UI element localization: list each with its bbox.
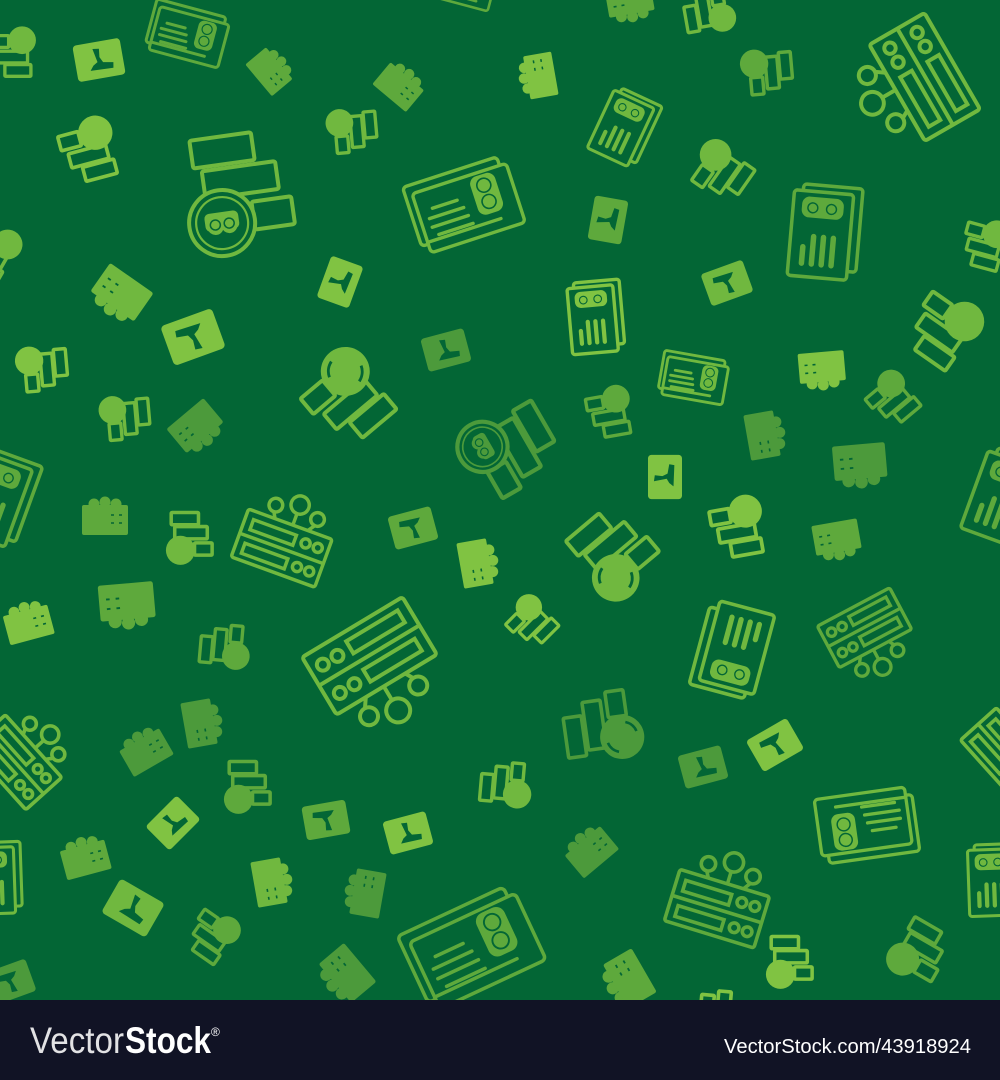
icon: gift card <box>456 537 502 589</box>
icon: litecoin card <box>746 718 804 772</box>
icon: magnifier <box>182 901 246 968</box>
icon: magnifier <box>958 213 1000 273</box>
icon: magnifier <box>324 106 378 154</box>
icon: gift card <box>559 820 619 879</box>
icon: magnifier <box>859 364 925 431</box>
icon: litecoin card <box>387 506 439 550</box>
icon: gift card <box>82 496 128 535</box>
icon: server with nodes <box>960 689 1000 803</box>
icon: litecoin card <box>301 799 351 841</box>
icon: gift card <box>311 943 376 1009</box>
icon: gift card <box>85 263 154 329</box>
icon: large magnifier with bars <box>177 128 298 260</box>
icon: magnifier <box>559 499 670 611</box>
icon: report paper <box>0 445 43 550</box>
icon: magnifier <box>707 492 769 560</box>
icon: magnifier <box>55 112 123 186</box>
icon: litecoin card <box>160 308 226 366</box>
icon: gift card <box>250 856 296 908</box>
icon: gift card <box>604 0 656 26</box>
icon: gift card <box>180 697 226 749</box>
icon: server with nodes <box>302 597 458 749</box>
icon: gift card <box>811 518 863 564</box>
icon: browser with coin <box>657 350 730 405</box>
icon: magnifier <box>166 512 212 565</box>
icon: server with nodes <box>231 480 343 587</box>
icon: magnifier <box>560 687 647 767</box>
logo: VectorStock: Vector <box>30 1020 124 1061</box>
icon: litecoin card <box>677 745 729 789</box>
icon: gift card <box>341 867 387 919</box>
icon: magnifier <box>899 281 992 375</box>
icon: magnifier <box>479 760 534 810</box>
icon: report paper <box>566 279 625 355</box>
logo: VectorStock: Stock <box>125 1020 211 1061</box>
icon: server with nodes <box>0 696 83 810</box>
icon: gift card <box>57 831 112 880</box>
icon: litecoin card <box>587 195 629 245</box>
icon: gift card <box>98 581 157 632</box>
icon: server with nodes <box>664 839 779 948</box>
logo: registered mark: ® <box>211 1025 220 1039</box>
icon: gift card <box>595 948 657 1013</box>
icon: magnifier <box>880 914 955 991</box>
icon: report paper <box>787 183 863 281</box>
icon: magnifier <box>14 343 69 393</box>
icon: magnifier <box>0 26 36 76</box>
icon: magnifier <box>682 0 738 38</box>
icon: gift card <box>798 350 847 392</box>
icon: gift card <box>743 409 789 461</box>
icon: magnifier <box>0 215 28 285</box>
icon: gift card <box>166 398 229 460</box>
icon: report paper <box>689 599 775 701</box>
icon: litecoin card <box>0 958 37 1006</box>
icon: magnifier <box>224 761 270 814</box>
icon: magnifier <box>448 392 566 507</box>
footer bar <box>0 1000 1000 1080</box>
icon: report paper <box>960 445 1000 550</box>
icon: magnifier <box>684 988 741 1040</box>
icon: browser with coin <box>397 884 546 1012</box>
icon: browser with coin <box>144 0 231 68</box>
icon: report paper <box>0 841 22 915</box>
icon: litecoin card <box>382 811 434 855</box>
icon: litecoin card <box>700 259 754 307</box>
icon: litecoin card <box>316 255 364 309</box>
icon: magnifier <box>766 936 812 989</box>
image url: VectorStock.com/43918924 <box>724 1036 971 1058</box>
icon: magnifier <box>290 337 404 452</box>
icon: server with nodes <box>817 588 925 692</box>
icon: magnifier <box>499 589 563 652</box>
icon: litecoin card <box>145 795 201 851</box>
icon: litecoin card <box>72 38 126 82</box>
icon: gift card <box>372 56 429 112</box>
icon: litecoin card <box>420 328 472 372</box>
icon: magnifier <box>739 46 794 96</box>
icon: magnifier <box>584 383 636 439</box>
icon: gift card <box>0 596 55 645</box>
icon: browser with coin <box>403 155 525 255</box>
icon: litecoin card <box>648 455 682 499</box>
icon: gift card <box>515 52 559 101</box>
icon: browser with coin <box>814 786 920 864</box>
icon: magnifier <box>199 623 252 671</box>
icon: gift card <box>245 42 298 96</box>
icon: report paper <box>967 843 1000 917</box>
icon: report paper <box>587 85 662 169</box>
icon: gift card <box>115 721 174 777</box>
icon: server with nodes <box>836 13 980 160</box>
icon: magnifier <box>683 133 758 207</box>
icon: browser with coin <box>424 0 499 11</box>
icon: gift card <box>832 442 888 491</box>
icon: magnifier <box>97 393 151 441</box>
icon: litecoin card <box>101 878 165 938</box>
